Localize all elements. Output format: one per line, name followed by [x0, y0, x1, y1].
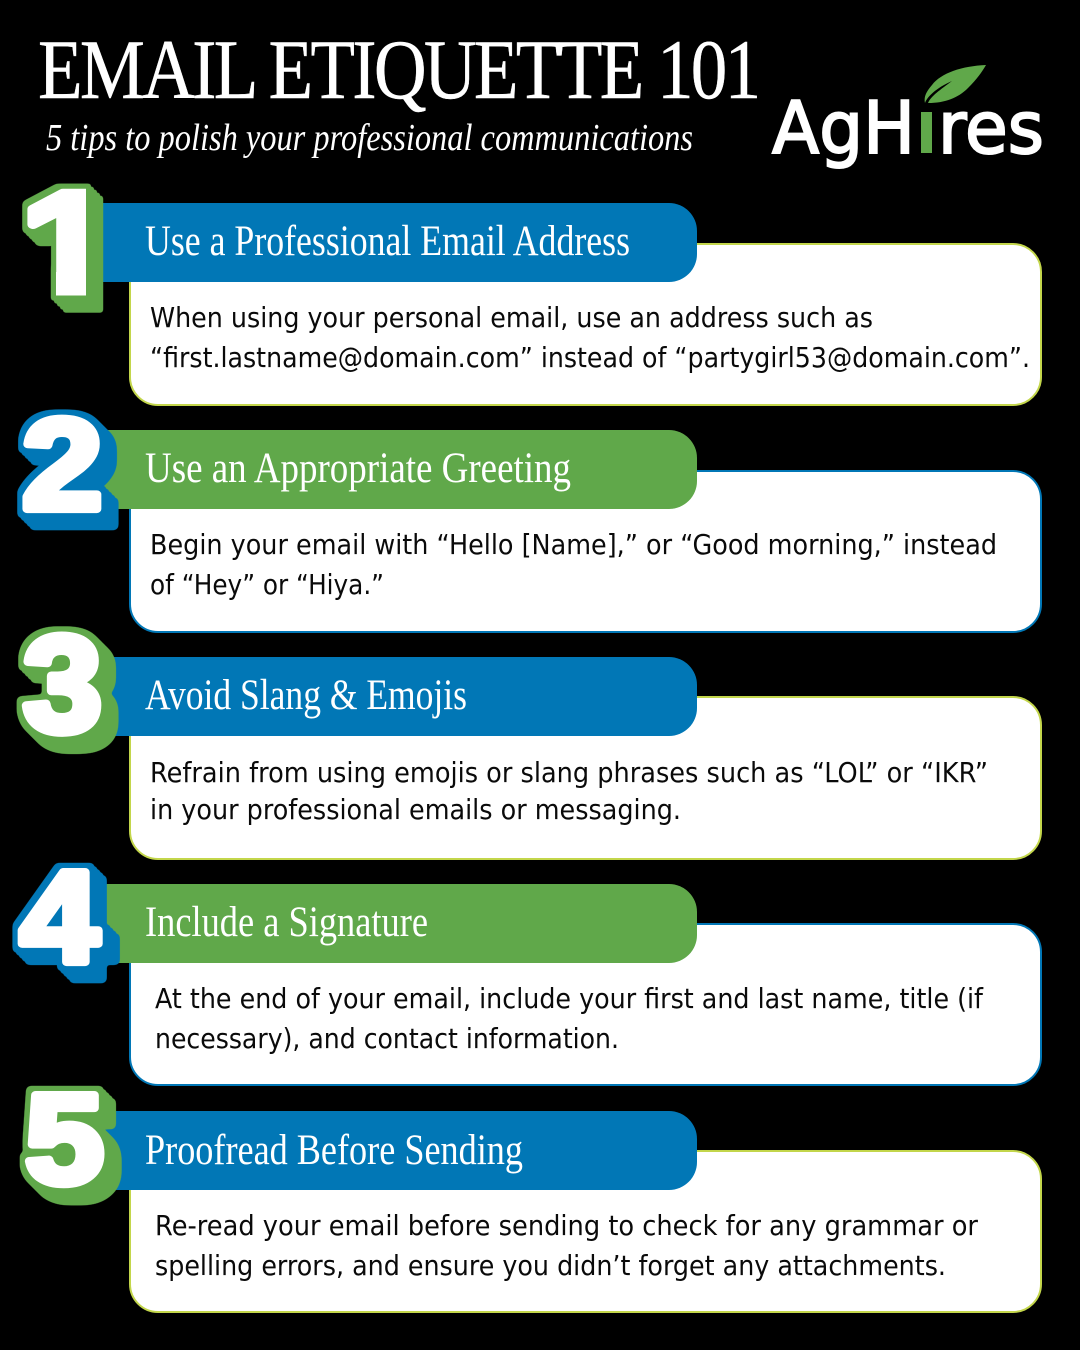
number 3: 3: [23, 609, 102, 760]
panel: tip 2: [22, 393, 1041, 632]
logo: AgHires: [772, 65, 1044, 170]
number 1: 1: [21, 163, 118, 321]
text: tip 2 description: Begin your email with “Hello [Name],” or “Good morning,” instead: [150, 528, 997, 561]
panel: tip 4: [20, 843, 1041, 1085]
heading: tip 1: Use a Professional Email Address: [145, 218, 630, 265]
icon: leaf: [925, 65, 986, 103]
text: tip 1 description: [150, 301, 1030, 374]
text: tip 2 description: [150, 528, 997, 601]
panel: tip 5: [25, 1068, 1041, 1312]
card: tip 3 body: [130, 697, 1041, 859]
text: tip 4 description: At the end of your email, include your first and last name, title (if: [155, 982, 984, 1015]
card: tip 5 body: [130, 1151, 1041, 1312]
number 2: 2: [22, 393, 103, 537]
panel: tip 1: [21, 163, 1041, 405]
logo wordmark: AgH: [772, 86, 915, 170]
number 5: 5: [25, 1068, 104, 1210]
subtitle: 5 tips to polish your professional communications: [46, 117, 693, 159]
heading: tip 3: Avoid Slang & Emojis: [145, 672, 467, 719]
text: tip 4 description: necessary), and contact information.: [155, 1022, 619, 1055]
number 4: 4: [20, 843, 99, 990]
text: tip 3 description: Refrain from using emojis or slang phrases such as “LOL” or “IKR”: [150, 756, 988, 789]
heading bar: tip 5: [96, 1111, 697, 1190]
heading: tip 2: Use an Appropriate Greeting: [145, 445, 571, 492]
heading: tip 4: Include a Signature: [145, 899, 428, 946]
heading bar: tip 4: [96, 884, 697, 963]
logo wordmark: [772, 86, 1044, 170]
panel: tip 3: [23, 609, 1041, 859]
text: tip 3 description: in your professional emails or messaging.: [150, 793, 681, 826]
card: tip 2 body: [130, 471, 1041, 632]
text: tip 1 description: When using your personal email, use an address such as: [150, 301, 873, 334]
text: tip 5 description: Re-read your email before sending to check for any grammar or: [155, 1209, 978, 1242]
heading bar: tip 3: [96, 657, 697, 736]
logo wordmark: res: [938, 86, 1044, 170]
heading bar: tip 1: [96, 203, 697, 282]
card: tip 4 body: [130, 924, 1041, 1085]
heading bar: tip 2: [96, 430, 697, 509]
title: EMAIL ETIQUETTE 101: [38, 23, 758, 117]
text: tip 5 description: spelling errors, and ensure you didn’t forget any attachments.: [155, 1249, 946, 1282]
text: tip 3 description: [150, 756, 988, 826]
text: tip 2 description: of “Hey” or “Hiya.”: [150, 568, 384, 601]
heading: tip 5: Proofread Before Sending: [145, 1127, 523, 1174]
text: tip 4 description: [155, 982, 984, 1055]
card: tip 1 body: [130, 244, 1041, 405]
text: tip 5 description: [155, 1209, 978, 1282]
